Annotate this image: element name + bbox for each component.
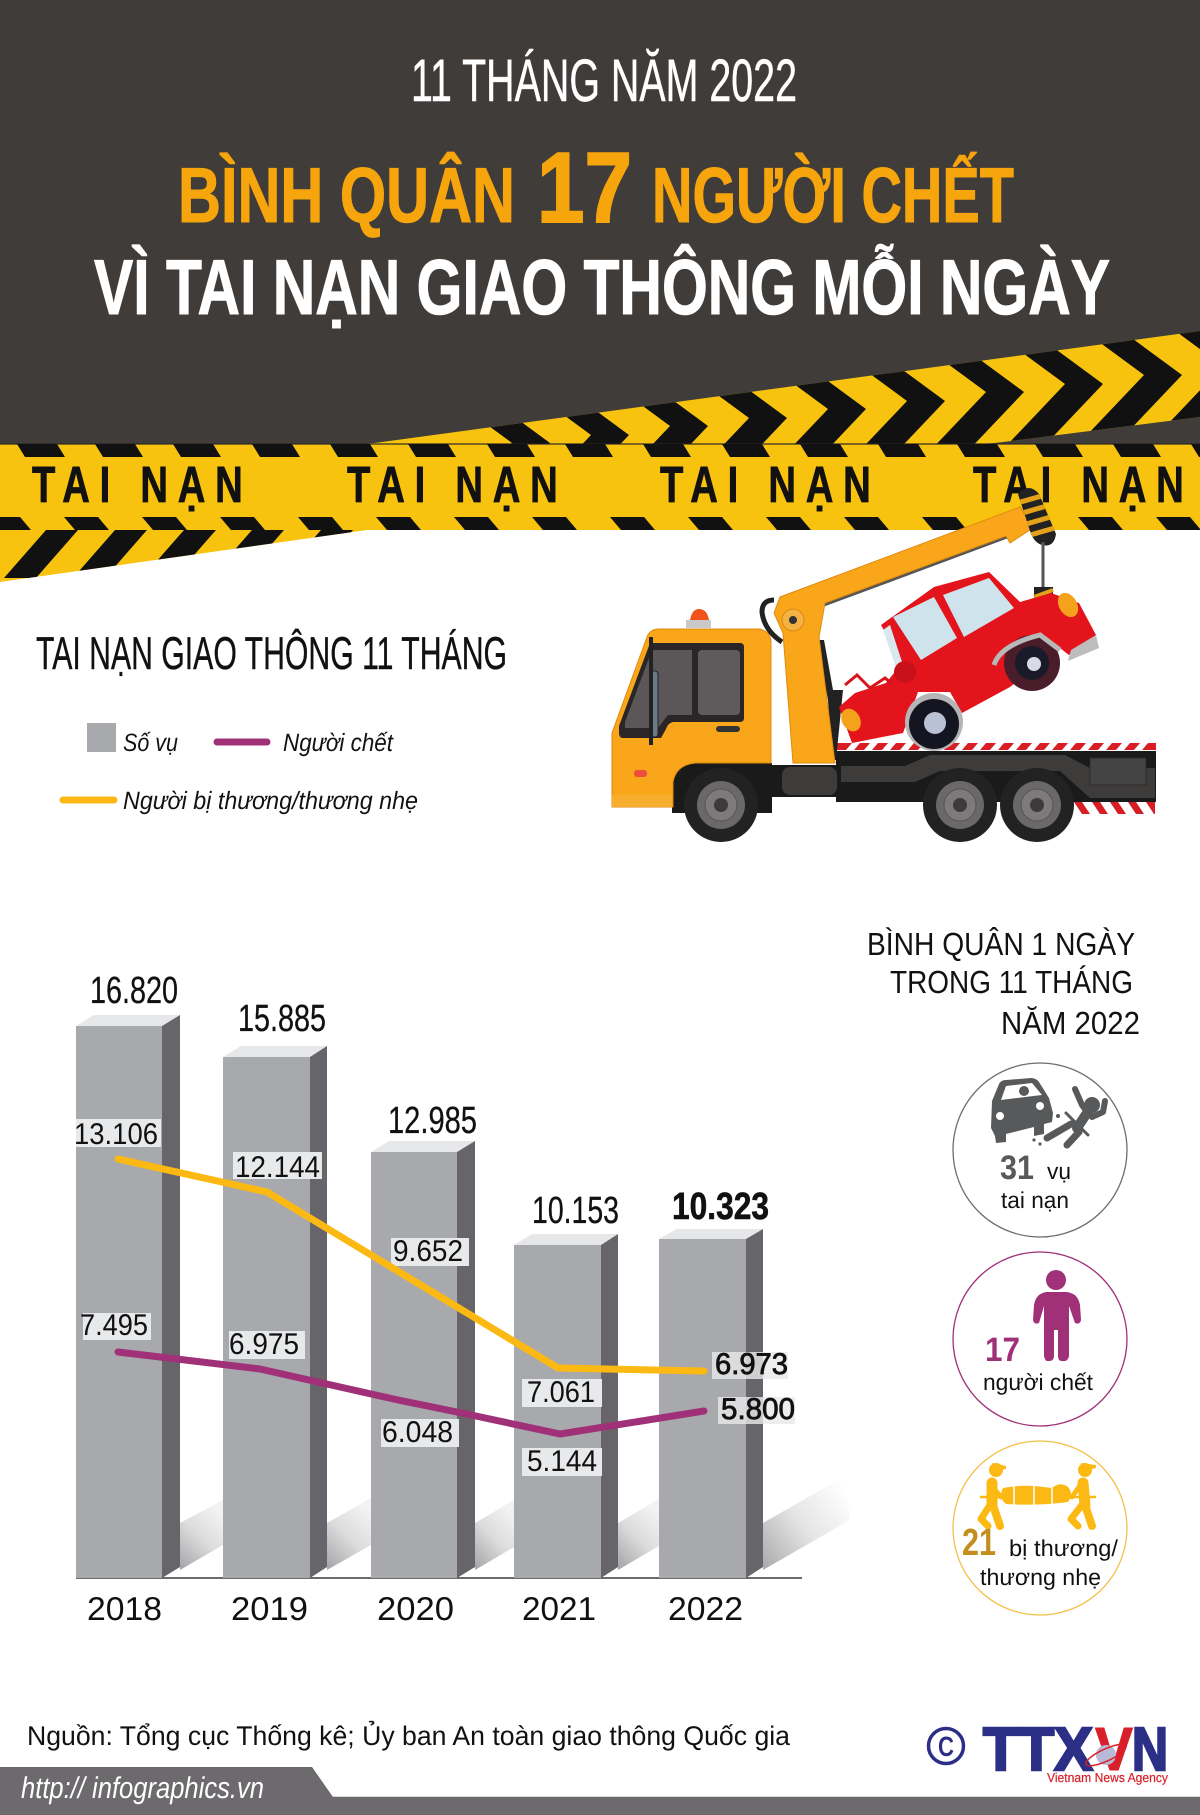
value labels: injured: 13.106	[74, 1118, 158, 1151]
value labels: deaths: 5.800	[721, 1393, 795, 1426]
daily average heading: TRONG 11 THÁNG	[890, 964, 1133, 1000]
value labels: deaths: 5.144	[527, 1445, 597, 1478]
beacon	[690, 609, 709, 620]
circle: 21 injured: thương nhẹ	[980, 1564, 1101, 1590]
legend	[63, 723, 418, 815]
circle: 17 deaths	[953, 1252, 1127, 1426]
tape words	[32, 456, 1184, 513]
cab	[612, 629, 771, 807]
line: injured	[118, 1159, 704, 1371]
circle: 21 injured: 21	[962, 1522, 996, 1564]
illustration: tow truck with crashed car	[612, 488, 1156, 842]
value labels: injured	[74, 1118, 788, 1409]
circle: 31 accidents: vụ	[1047, 1158, 1071, 1184]
circle: 21 injured	[953, 1441, 1127, 1615]
legend: injured: Người bị thương/thương nhẹ	[123, 787, 418, 815]
bar 2022	[659, 1186, 769, 1627]
footer band with url tab	[0, 1767, 1200, 1815]
bar 2018: 16.820	[90, 970, 178, 1012]
crane	[762, 488, 1058, 763]
bottom stripe row	[0, 517, 1200, 530]
bar 2019	[223, 998, 327, 1627]
cab window	[619, 643, 744, 738]
top stripe row	[17, 444, 1200, 457]
headline line 1: 17	[537, 132, 632, 244]
value labels: injured: 6.973	[715, 1348, 788, 1381]
logo: copyright TTXVN: TTX	[983, 1715, 1093, 1783]
angled chevron tape	[368, 331, 1200, 444]
circle: 31 accidents	[953, 1063, 1127, 1237]
bar 2019: 2019	[231, 1590, 308, 1627]
circle: 31 accidents: tai nạn	[1001, 1187, 1069, 1213]
daily average heading: BÌNH QUÂN 1 NGÀY	[867, 926, 1135, 962]
subtitle: 11 months 2022: 11 THÁNG NĂM 2022	[411, 47, 797, 114]
value labels: injured: 7.061	[527, 1376, 595, 1409]
lower left tape fragment	[0, 530, 367, 582]
value labels: injured: 9.652	[393, 1235, 463, 1268]
headline line 1: NGƯỜI CHẾT	[652, 151, 1014, 239]
value labels: deaths: 6.975	[229, 1328, 299, 1361]
tape words: TAI NẠN	[973, 456, 1184, 513]
tape words: TAI NẠN	[32, 456, 243, 513]
logo: copyright TTXVN: N	[1132, 1715, 1168, 1783]
daily average heading	[867, 926, 1140, 1041]
chart: accidents, deaths, injured 2018-2022	[74, 970, 850, 1627]
bar 2021: 10.153	[532, 1190, 619, 1232]
bar 2020: 12.985	[388, 1100, 477, 1142]
logo: copyright TTXVN: C	[938, 1731, 954, 1762]
bar 2019: 15.885	[238, 998, 326, 1040]
bar shadows	[180, 1476, 850, 1570]
bar 2022: 10.323	[672, 1186, 769, 1228]
header background	[0, 0, 1200, 444]
legend: accidents: Số vụ	[123, 729, 178, 757]
bar 2020	[371, 1100, 477, 1627]
section heading: TAI NẠN GIAO THÔNG 11 THÁNG	[36, 627, 507, 679]
headline line 1: BÌNH QUÂN	[178, 151, 515, 239]
value labels: deaths	[80, 1309, 795, 1478]
flatbed	[672, 743, 1156, 814]
logo: copyright TTXVN: Vietnam News Agency	[1047, 1770, 1168, 1785]
legend: deaths: Người chết	[283, 729, 394, 757]
bar 2018: 2018	[87, 1590, 162, 1627]
icon: person	[1033, 1270, 1081, 1361]
circle: 17 deaths: 17	[985, 1331, 1020, 1369]
bar 2022: 2022	[668, 1590, 743, 1627]
value labels: injured: 12.144	[235, 1151, 320, 1184]
bar 2021	[514, 1190, 619, 1627]
wheels	[684, 768, 1074, 842]
value labels: deaths: 6.048	[382, 1416, 453, 1449]
tape words: TAI NẠN	[347, 456, 558, 513]
legend: accidents	[87, 723, 178, 757]
bar 2018	[76, 970, 180, 1627]
tape words: TAI NẠN	[660, 456, 871, 513]
bar 2021: 2021	[522, 1590, 596, 1627]
logo: copyright TTXVN: V	[1095, 1715, 1133, 1783]
icon: stretcher bearers	[980, 1463, 1096, 1526]
main yellow tape	[0, 443, 1200, 530]
bar 2020: 2020	[377, 1590, 454, 1627]
logo: copyright TTXVN	[928, 1715, 1168, 1785]
axis	[76, 1577, 802, 1579]
circle: 17 deaths: người chết	[983, 1369, 1094, 1395]
circle: 31 accidents: 31	[1000, 1149, 1034, 1187]
title block	[94, 47, 1110, 331]
circle: 21 injured: bị thương/	[1009, 1535, 1119, 1561]
value labels: deaths: 7.495	[80, 1309, 148, 1342]
daily average heading: NĂM 2022	[1001, 1005, 1140, 1041]
hook beam	[1018, 488, 1056, 546]
source note: Nguồn: Tổng cục Thống kê; Ủy ban An toàn giao thông Quốc gia	[27, 1720, 791, 1751]
crashed car	[837, 572, 1099, 751]
headline line 1	[178, 132, 1014, 244]
icon: car hitting motorbike	[991, 1078, 1105, 1146]
footer band with url tab: http:// infographics.vn	[21, 1772, 264, 1805]
line: deaths	[118, 1352, 704, 1434]
